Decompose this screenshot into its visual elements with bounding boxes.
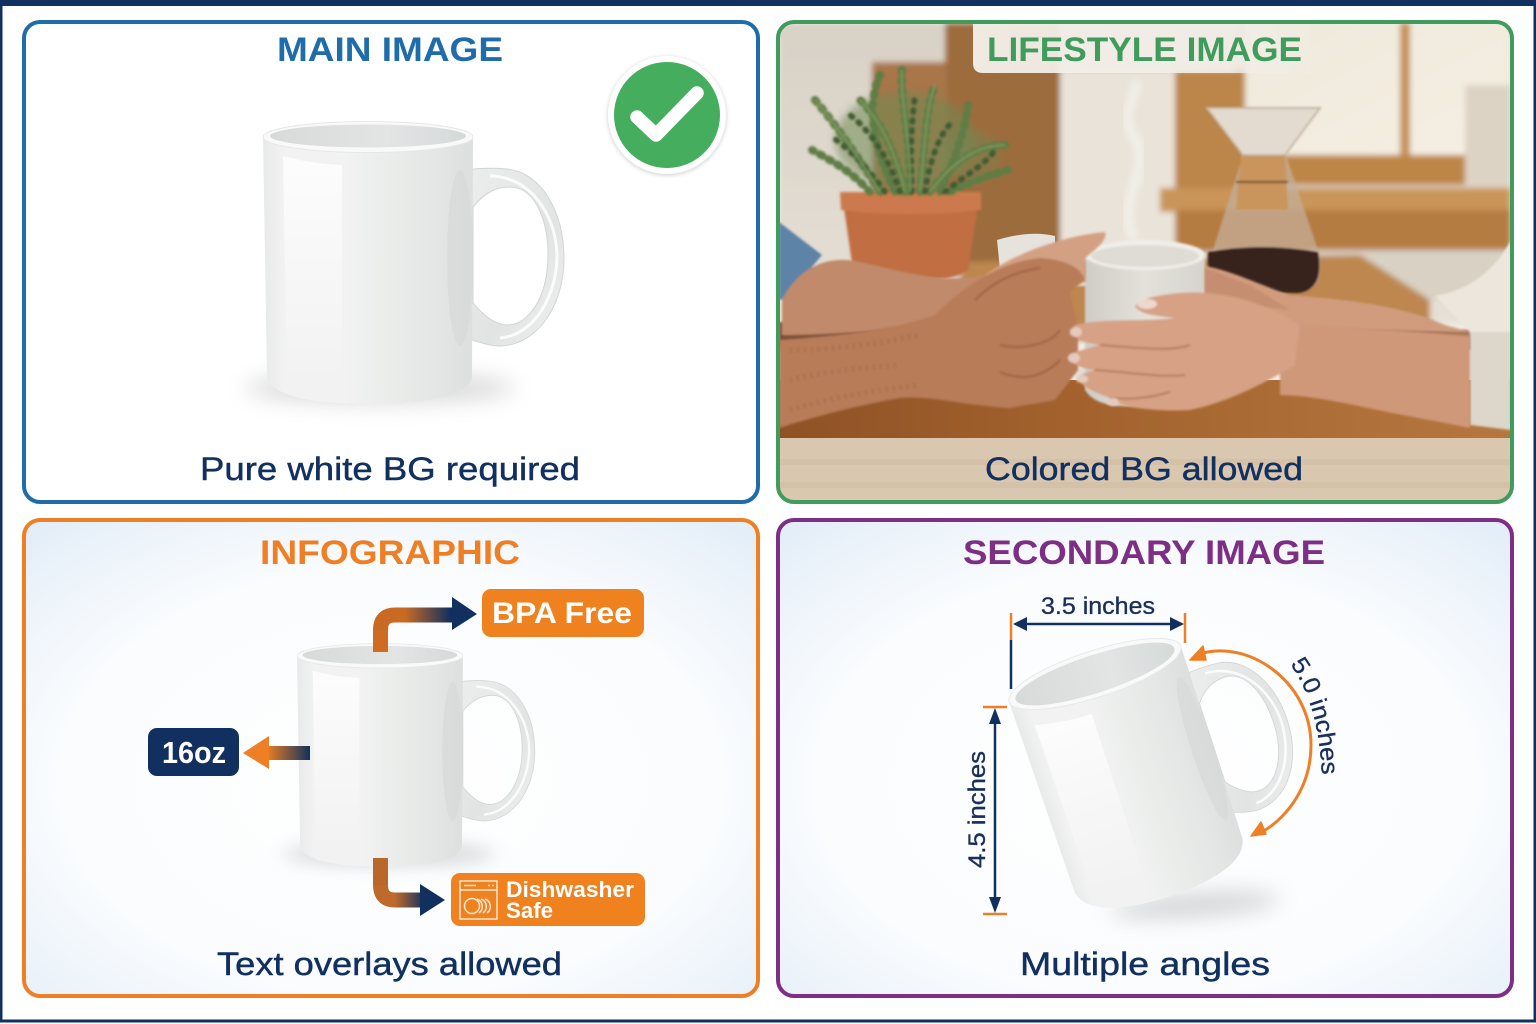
heading plate (973, 24, 1256, 73)
callout: 16oz (148, 728, 239, 776)
panel: main image (24, 22, 758, 502)
herb plant (812, 70, 1008, 280)
steam (1127, 80, 1140, 240)
callout: BPA Free (482, 589, 644, 637)
heading: lifestyle image: LIFESTYLE IMAGE (987, 31, 1302, 69)
small cup behind (997, 234, 1055, 270)
icon: dishwasher (460, 881, 497, 919)
arrow: to 16oz (243, 736, 310, 769)
sleeves and forearms (779, 222, 1511, 430)
dimension: height (964, 707, 1007, 914)
callout: Dishwasher Safe: Dishwasher (506, 877, 634, 902)
caption: colored bg: Colored BG allowed (985, 451, 1303, 487)
dimension: width: 3.5 inches (1041, 593, 1155, 620)
caption: text overlays: Text overlays allowed (217, 946, 562, 982)
panel: infographic (24, 520, 758, 996)
lifestyle photo illustration (779, 22, 1511, 502)
panel: secondary image (776, 518, 1514, 998)
arrow: to Dishwasher Safe (380, 858, 445, 916)
callout: 16oz: 16oz (162, 735, 226, 770)
callout: BPA Free: BPA Free (492, 597, 632, 630)
dimension: handle arc (1189, 645, 1336, 837)
dimension: width (1011, 593, 1185, 689)
caption: multiple angles: Multiple angles (1020, 946, 1270, 982)
coffee carafe (1207, 108, 1320, 293)
table (779, 380, 1511, 440)
panel: lifestyle image (778, 22, 1512, 502)
arrow: to BPA Free (380, 597, 477, 652)
callout: Dishwasher Safe (451, 873, 645, 926)
caption: pure white: Pure white BG required (200, 451, 580, 487)
caption band over table (779, 438, 1511, 502)
heading: infographic: INFOGRAPHIC (260, 534, 520, 572)
callout: Dishwasher Safe: Safe (506, 898, 553, 923)
mug held by hands (1060, 240, 1205, 406)
white mug (245, 122, 564, 404)
mug with overlays (283, 644, 535, 867)
tilted mug (1002, 600, 1328, 925)
heading: secondary image: SECONDARY IMAGE (963, 534, 1325, 572)
hands around mug (779, 232, 1470, 428)
dimension: handle arc: 5.0 inches (1292, 656, 1336, 774)
panel border: green (778, 22, 1512, 502)
heading: main image: MAIN IMAGE (277, 31, 503, 69)
dimension: height: 4.5 inches (964, 751, 991, 868)
icon: green check badge (608, 56, 726, 175)
